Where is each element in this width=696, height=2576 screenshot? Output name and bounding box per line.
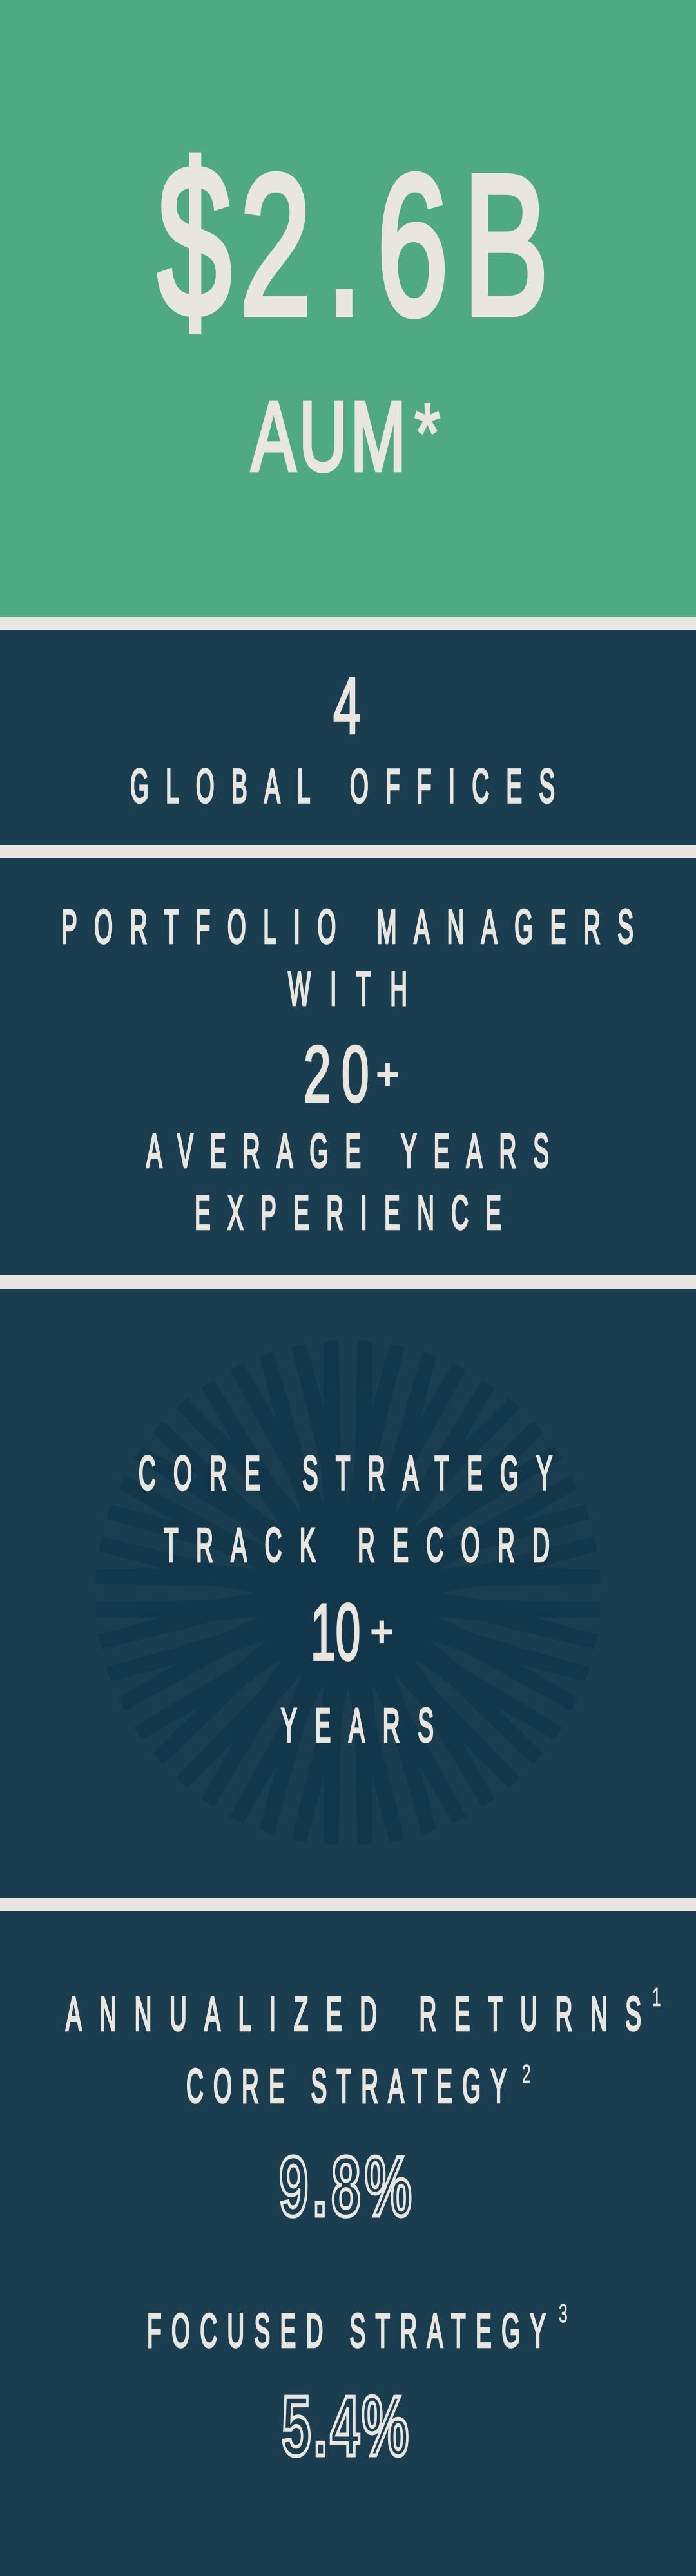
number: 20: 20	[304, 1030, 369, 1119]
number: 4: 4	[333, 661, 361, 750]
label: track record: TRACK RECORD	[164, 1519, 550, 1572]
label: portfolio managers: PORTFOLIO MANAGERS	[61, 901, 633, 954]
footnote marker 1: 1	[652, 1983, 661, 2012]
label: focused strategy: FOCUSED STRATEGY	[147, 2305, 546, 2358]
panel: core strategy track record	[0, 1289, 696, 1898]
heading: annualized returns: ANNUALIZED RETURNS	[66, 1988, 641, 2041]
label: years: YEARS	[281, 1700, 434, 1752]
label: global offices: GLOBAL OFFICES	[130, 760, 555, 813]
label: experience: EXPERIENCE	[195, 1187, 501, 1240]
big number: dollar sign: $	[158, 120, 231, 361]
footnote marker 3: 3	[559, 2299, 568, 2329]
number: 10: 10	[311, 1588, 360, 1677]
panel: portfolio managers	[0, 858, 696, 1275]
footnote marker 2: 2	[522, 2060, 531, 2089]
label: average years: AVERAGE YEARS	[146, 1125, 549, 1178]
plus sign: +	[376, 1051, 399, 1098]
label: core strategy: CORE STRATEGY	[139, 1447, 552, 1500]
value: 5.4%: 5.4%	[282, 2380, 409, 2474]
panel: annualized returns	[0, 1911, 696, 2576]
label: with: WITH	[288, 963, 407, 1016]
big number: 2.6B: 2.6B	[240, 134, 548, 357]
label: AUM: AUM	[251, 381, 406, 491]
panel: assets under management	[0, 0, 696, 617]
sunburst background	[89, 1334, 607, 1852]
plus sign: +	[371, 1609, 393, 1656]
panel: global offices	[0, 630, 696, 845]
label: core strategy: CORE STRATEGY	[186, 2060, 507, 2113]
value: 9.8%: 9.8%	[279, 2140, 412, 2234]
footnote marker: asterisk: *	[414, 386, 440, 480]
